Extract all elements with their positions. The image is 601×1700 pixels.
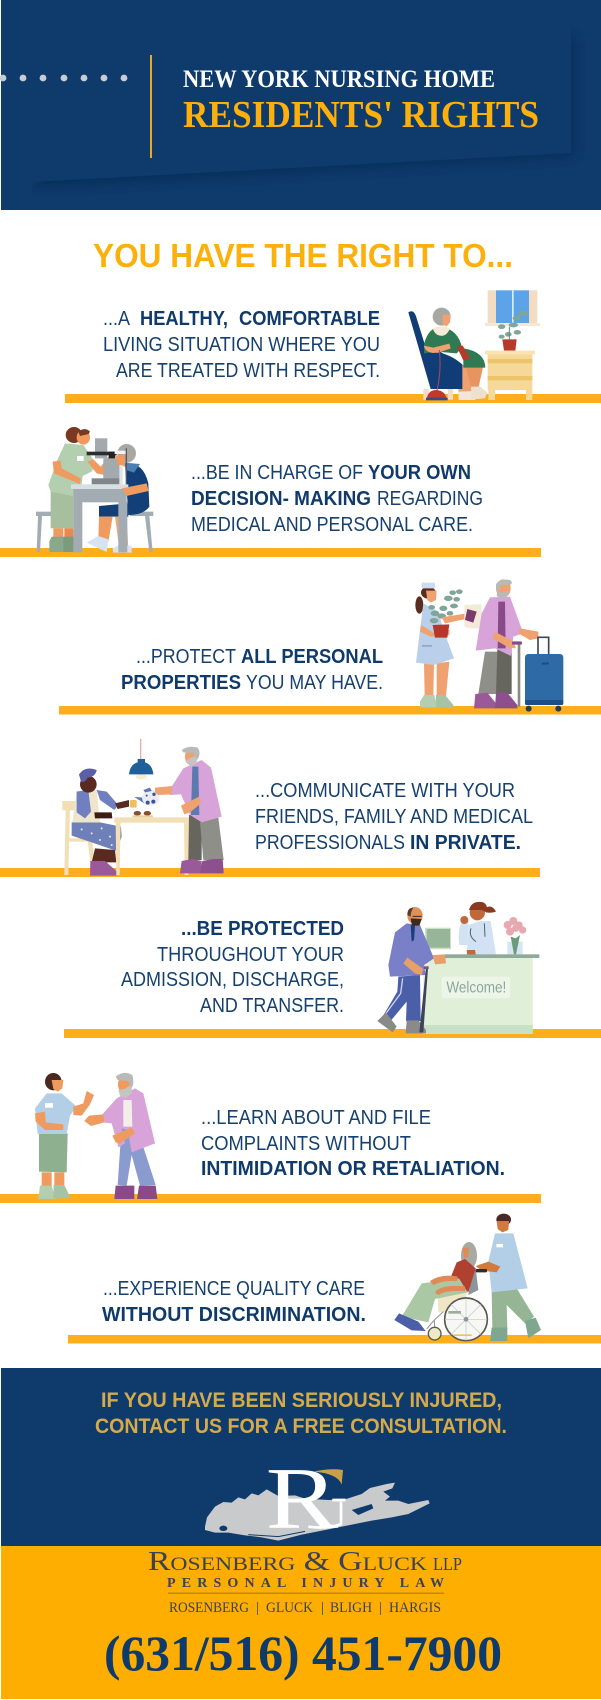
panel: right 1 healthy living — [65, 290, 601, 403]
tagline: PERSONAL INJURY LAW — [167, 1576, 444, 1591]
text 3: ...PROTECT — [136, 646, 236, 668]
bar 6 — [0, 1194, 541, 1203]
text 1: COMFORTABLE — [239, 308, 380, 330]
header panel — [0, 0, 601, 210]
title: NEW YORK NURSING HOME — [183, 64, 495, 93]
text 4: ...COMMUNICATE WITH YOUR — [255, 780, 515, 802]
text 2: REGARDING — [377, 488, 483, 510]
text 7: WITHOUT DISCRIMINATION. — [102, 1304, 366, 1326]
text: consultation call to action: IF YOU HAVE BEEN SERIOUSLY INJURED, — [101, 1389, 502, 1412]
text 5 — [121, 918, 344, 1017]
bar 2 — [0, 548, 541, 557]
title: RESIDENTS' RIGHTS — [183, 94, 539, 136]
panel: right 2 own decision-making — [0, 427, 541, 557]
text 3: ALL PERSONAL — [241, 646, 383, 668]
text 4: PROFESSIONALS — [255, 832, 405, 854]
partner names: HARGIS — [389, 1600, 441, 1616]
text 1: ...A — [103, 308, 131, 330]
bar 3 — [59, 706, 601, 714]
partner names — [169, 1600, 441, 1616]
partner names: | — [321, 1600, 324, 1616]
text 5: ...BE PROTECTED — [181, 918, 344, 940]
text 1: ARE TREATED WITH RESPECT. — [116, 360, 380, 382]
text 6: ...LEARN ABOUT AND FILE — [201, 1107, 431, 1129]
dotted line — [0, 75, 127, 81]
text 4: FRIENDS, FAMILY AND MEDICAL — [255, 806, 533, 828]
text 2: MEDICAL AND PERSONAL CARE. — [191, 514, 473, 536]
illustration: man at welcome desk with doctor — [377, 902, 539, 1034]
text: consultation call to action — [95, 1389, 507, 1438]
bar 1 — [65, 394, 601, 403]
text 5: THROUGHOUT YOUR — [157, 944, 344, 966]
text 2: YOUR OWN — [368, 462, 471, 484]
text 3: YOU MAY HAVE. — [246, 672, 383, 694]
illustration: woman knitting in armchair — [408, 290, 540, 400]
heading: you have the right to: YOU HAVE THE RIGHT TO... — [93, 237, 513, 274]
bar 7 — [68, 1335, 601, 1344]
text 6: COMPLAINTS WITHOUT — [201, 1133, 411, 1155]
logo: long island map with RG monogram: R — [266, 1451, 339, 1548]
panel: right 3 personal properties — [59, 579, 601, 714]
panel: footer call to action — [1, 1368, 601, 1548]
text 3 — [121, 646, 383, 694]
illustration: nurse with plant and man with suitcase — [415, 579, 563, 712]
text 5: ADMISSION, DISCHARGE, — [121, 969, 344, 991]
panel: right 5 be protected — [64, 902, 601, 1038]
partner names: | — [379, 1600, 382, 1616]
text 1: HEALTHY, — [140, 308, 228, 330]
illustration: caregiver pushing woman in wheelchair — [394, 1214, 541, 1341]
title — [183, 64, 539, 136]
panel: right 7 quality care — [68, 1214, 601, 1344]
text 1 — [103, 308, 380, 382]
text 4 — [255, 780, 533, 854]
illustration: man at welcome desk with doctor: Welcome! — [446, 979, 506, 996]
text 7 — [102, 1278, 366, 1326]
partner names: ROSENBERG — [169, 1600, 249, 1616]
text 3: PROPERTIES — [121, 672, 241, 694]
text: consultation call to action: CONTACT US FOR A FREE CONSULTATION. — [95, 1415, 507, 1438]
partner names: | — [256, 1600, 259, 1616]
illustration: nurse and patient at eye exam — [36, 427, 153, 553]
vertical divider — [150, 55, 152, 158]
partner names: GLUCK — [266, 1600, 313, 1616]
text 2 — [191, 462, 483, 536]
partner names: BLIGH — [330, 1600, 372, 1616]
panel: right 4 communicate in private — [0, 739, 540, 877]
bar 5 — [64, 1029, 601, 1038]
text 2: ...BE IN CHARGE OF — [191, 462, 363, 484]
firm name: Rosenberg & Gluck — [148, 1546, 427, 1576]
illustration: man pouring tea for woman at table — [62, 739, 224, 876]
text 5: AND TRANSFER. — [200, 995, 344, 1017]
illustration: caregiver talking with older man — [35, 1073, 157, 1199]
panel: right 6 file complaints — [0, 1073, 541, 1203]
text 6: INTIMIDATION OR RETALIATION. — [201, 1158, 505, 1180]
text 6 — [201, 1107, 505, 1180]
text 4: IN PRIVATE. — [410, 832, 521, 854]
firm name: LLP — [433, 1554, 462, 1574]
panel: footer firm info — [1, 1546, 601, 1699]
logo: long island map with RG monogram — [205, 1451, 430, 1548]
bar 4 — [0, 868, 540, 877]
text 7: ...EXPERIENCE QUALITY CARE — [103, 1278, 365, 1300]
phone number: (631/516) 451-7900 — [104, 1625, 502, 1681]
text 1: LIVING SITUATION WHERE YOU — [103, 334, 380, 356]
text 2: DECISION- MAKING — [191, 488, 371, 510]
